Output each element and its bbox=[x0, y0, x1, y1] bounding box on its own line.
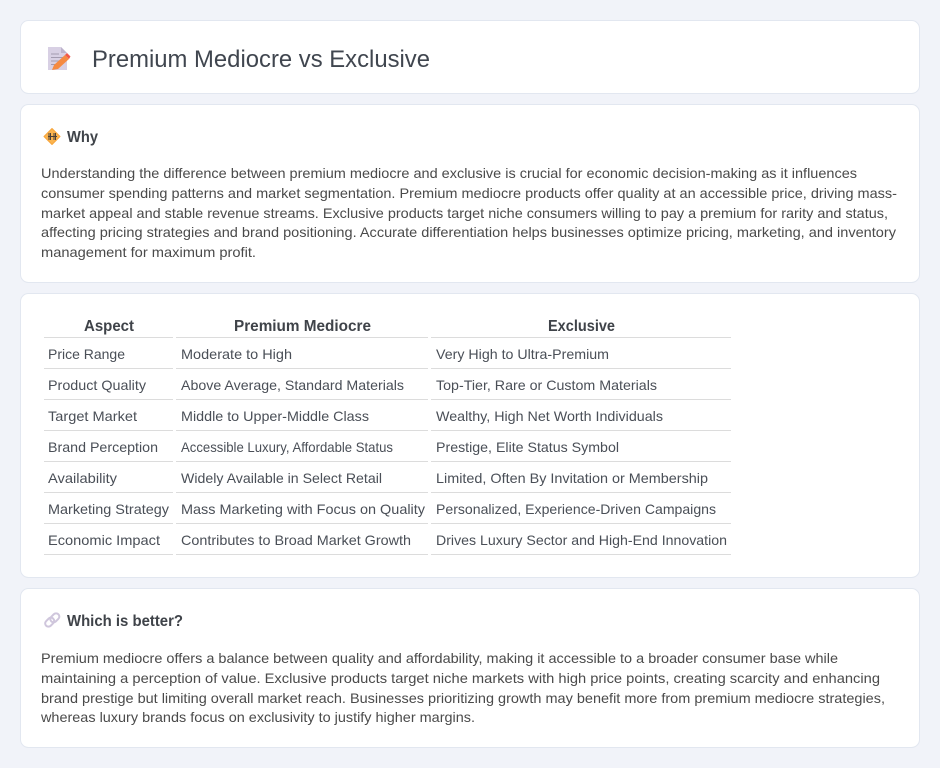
row: target market: Wealthy, High Net Worth Individuals bbox=[436, 408, 663, 424]
row: price range: Moderate to High bbox=[181, 346, 292, 362]
row: availability bbox=[48, 470, 708, 486]
panel: which is better bbox=[20, 588, 920, 748]
row: economic impact bbox=[48, 532, 727, 548]
row: price range: Price Range bbox=[48, 346, 125, 362]
text block: why: Understanding the difference between premium mediocre and exclusive is crucial for economic decision-making as it influences bbox=[41, 165, 857, 181]
row: marketing strategy: Personalized, Experience-Driven Campaigns bbox=[436, 501, 716, 517]
row: product quality: Top-Tier, Rare or Custom Materials bbox=[436, 377, 657, 393]
row: economic impact: Economic Impact bbox=[48, 532, 160, 548]
row: target market bbox=[48, 408, 663, 424]
row: brand perception: Accessible Luxury, Affordable Status bbox=[181, 439, 393, 455]
row: target market: Target Market bbox=[48, 408, 137, 424]
text block: why: consumer spending patterns and market segmentation. Premium mediocre products offer quality at an accessible price, driving mass- bbox=[41, 185, 897, 201]
row: marketing strategy: Marketing Strategy bbox=[48, 501, 169, 517]
text block: why: market appeal and stable revenue streams. Exclusive products target niche consumers willing to pay a premium for rarity and status, bbox=[41, 205, 888, 221]
heading: why: Why bbox=[67, 129, 98, 146]
row: economic impact: Drives Luxury Sector and High-End Innovation bbox=[436, 532, 727, 548]
panel: why bbox=[20, 104, 920, 282]
icon: document with pencil bbox=[48, 47, 70, 70]
panel: comparison table bbox=[20, 294, 920, 578]
row: target market: Middle to Upper-Middle Class bbox=[181, 408, 369, 424]
row: availability: Availability bbox=[48, 470, 117, 486]
table header bbox=[84, 318, 615, 335]
heading: which is better: Which is better? bbox=[67, 613, 183, 630]
row: marketing strategy: Mass Marketing with Focus on Quality bbox=[181, 501, 425, 517]
row: price range: Very High to Ultra-Premium bbox=[436, 346, 609, 362]
icon: diamond sign bbox=[44, 128, 60, 144]
text block: which is better: Premium mediocre offers a balance between quality and affordability, making it accessible to a broader consumer base while bbox=[41, 650, 838, 666]
text block: which is better bbox=[40, 650, 885, 725]
text block: why: management for maximum profit. bbox=[41, 244, 256, 260]
row: product quality: Product Quality bbox=[48, 377, 146, 393]
row: product quality bbox=[48, 377, 657, 393]
text block: why bbox=[41, 165, 897, 260]
title: Premium Mediocre vs Exclusive bbox=[92, 46, 430, 73]
row: price range bbox=[48, 346, 609, 362]
row: marketing strategy bbox=[48, 501, 716, 517]
text block: which is better: brand prestige but limiting overall market reach. Businesses prioritizing growth may benefit more from premium mediocre strategies, bbox=[41, 690, 885, 706]
row: economic impact: Contributes to Broad Market Growth bbox=[181, 532, 411, 548]
row: product quality: Above Average, Standard Materials bbox=[181, 377, 404, 393]
text block: which is better: whereas luxury brands focus on exclusivity to justify higher margins. bbox=[40, 709, 475, 725]
row: brand perception: Prestige, Elite Status Symbol bbox=[436, 439, 619, 455]
row: brand perception: Brand Perception bbox=[48, 439, 158, 455]
table header: Premium Mediocre bbox=[234, 318, 371, 335]
row: availability: Limited, Often By Invitation or Membership bbox=[436, 470, 708, 486]
text block: which is better: maintaining a perception of value. Exclusive products target niche markets with high price points, creating scarcity and enhancing bbox=[41, 670, 880, 686]
text block: why: affecting pricing strategies and brand positioning. Accurate differentiation helps businesses optimize pricing, marketing, and inventory bbox=[41, 224, 896, 240]
row: availability: Widely Available in Select Retail bbox=[181, 470, 382, 486]
icon: chain link bbox=[44, 612, 61, 628]
panel: header bbox=[20, 20, 920, 94]
table header: Aspect bbox=[84, 318, 135, 335]
row: brand perception bbox=[48, 439, 619, 455]
table header: Exclusive bbox=[548, 318, 615, 335]
